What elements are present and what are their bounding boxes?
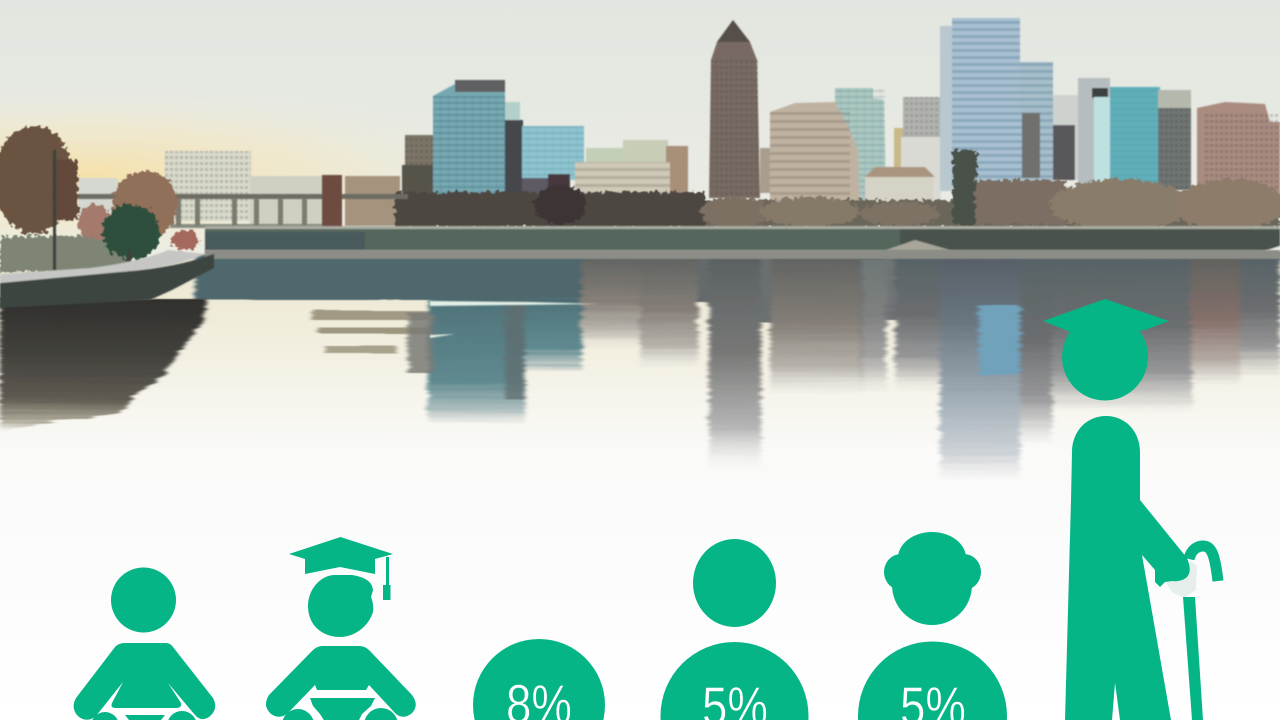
reflection: beige block (770, 254, 862, 394)
fade of water into white (0, 480, 1280, 720)
older adult head with hair (884, 532, 981, 625)
building: beige and mint (760, 88, 886, 215)
elder body and arm (1065, 416, 1190, 720)
building: blue towers (940, 18, 1053, 191)
building: white block (865, 97, 941, 216)
figure: elderly graduate with cane (1043, 299, 1218, 720)
near promenade (0, 150, 214, 308)
water base (0, 260, 1280, 500)
bridge (78, 175, 408, 250)
sky background (0, 0, 1280, 270)
reflection: teal tower (428, 300, 525, 425)
circle: 5% (858, 642, 1007, 720)
building: tall tower (709, 20, 760, 198)
elder head (1062, 314, 1148, 400)
reflection of skyline in water (195, 254, 1280, 482)
graduation cap (289, 537, 393, 600)
reflection: blue tower (940, 254, 1020, 482)
graduate diaper and legs (282, 698, 398, 720)
reflection band: upper left (195, 254, 590, 300)
figure: adult with 5% (660, 539, 808, 720)
adult head (693, 539, 776, 627)
trees along far bank (395, 150, 1280, 231)
walking cane (1183, 546, 1218, 720)
reflection: right cluster (1052, 254, 1192, 412)
figure: older adult with 5% (858, 532, 1007, 720)
figure: graduate baby (266, 537, 416, 720)
baby diaper and legs (91, 711, 197, 720)
reflection: buildings centre (582, 254, 640, 347)
far waterline (205, 250, 1280, 259)
baby torso and arms (74, 643, 215, 720)
photo: city skyline (78, 18, 1280, 226)
cane highlight (1165, 560, 1197, 598)
baby head (111, 568, 176, 632)
far embankment (205, 226, 1280, 261)
figure: baby (74, 568, 215, 720)
reflection: pale building bands (312, 310, 428, 352)
reflection: tall tower (709, 254, 761, 470)
building: right cluster (1053, 78, 1280, 215)
building: left cluster (402, 80, 688, 224)
elder graduation cap (1043, 299, 1169, 336)
graduate torso and arms (266, 646, 416, 717)
circle: 5% (660, 642, 808, 720)
reflection: bright streaks (430, 301, 600, 338)
building: pale left block (78, 151, 400, 226)
circle: 8% (473, 639, 605, 720)
near bank trees (0, 126, 199, 272)
graduate head (308, 575, 373, 637)
reflection: near bank shadow (0, 298, 207, 432)
